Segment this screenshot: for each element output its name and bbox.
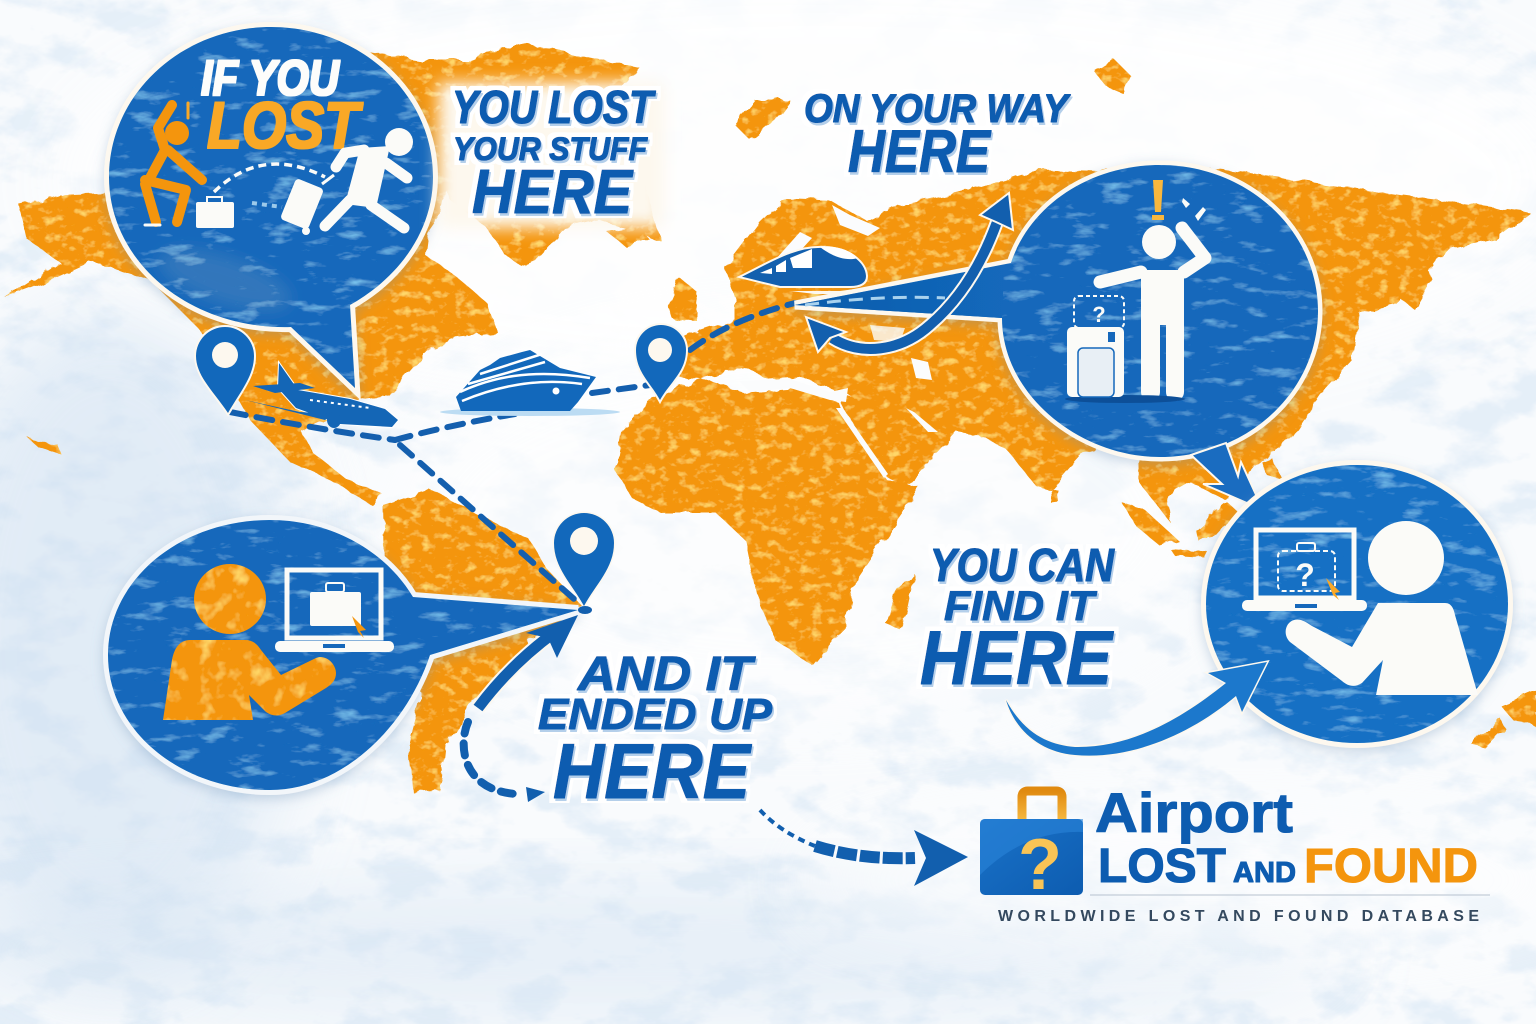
pin: origin [196, 327, 254, 413]
arrow: double curve from bubble [806, 193, 1013, 352]
bubble: finding item [1206, 465, 1508, 743]
alaskan chain [28, 438, 62, 455]
icon: train [739, 247, 885, 294]
icon: suitcase: ? [1092, 302, 1106, 327]
heading: lost: LOST [207, 88, 363, 162]
logo text [1095, 781, 1478, 893]
icon: surprised orange person [145, 103, 202, 225]
icon: running person with suitcase [280, 128, 413, 235]
arctic islands [735, 100, 790, 140]
pin: europe [636, 325, 686, 400]
arrow: dashed to logo [760, 810, 968, 886]
bubble: if you lost [109, 27, 433, 388]
route dashes [230, 303, 795, 606]
solid tail wedge [795, 265, 1004, 318]
icon: confused person [1100, 225, 1205, 402]
icon: cruise ship [440, 350, 620, 416]
heading: you can find it here [920, 539, 1115, 701]
heading: you lost your stuff here [438, 81, 664, 228]
arrow: curve to finding bubble [1006, 662, 1267, 756]
logo [980, 781, 1490, 925]
heading: on your way here: HERE [848, 118, 992, 185]
icon: dropped briefcase [196, 197, 234, 228]
heading: you can find it here: YOU CAN [930, 539, 1115, 591]
icon: laptop with dashed case: ? [1295, 557, 1315, 593]
heading: you lost your stuff here: YOUR STUFF [453, 131, 648, 167]
pin: found location [554, 513, 614, 614]
south america [383, 490, 582, 792]
greenland [368, 42, 660, 266]
heading: and it ended up here: AND IT [577, 648, 756, 701]
heading: and it ended up here: HERE [553, 727, 752, 815]
heading: you lost your stuff here: HERE [472, 158, 634, 227]
logo text: AND [1233, 857, 1296, 889]
world map [5, 42, 1536, 792]
heading: on your way here: ON YOUR WAY [804, 87, 1071, 131]
heading: on your way here [804, 87, 1071, 185]
heading: if you: IF YOU [201, 50, 341, 106]
icon: suitcase [1065, 296, 1185, 403]
icon: laptop with dashed case [1242, 530, 1367, 611]
bubble: confused traveller [795, 165, 1318, 457]
logo: WORLDWIDE LOST AND FOUND DATABASE [998, 908, 1479, 925]
icon: orange person [163, 564, 336, 720]
heading: you can find it here: FIND IT [944, 582, 1097, 629]
europe and asia [660, 162, 1530, 522]
uk [668, 278, 698, 322]
bubble: reporting lost item [108, 520, 578, 790]
heading: you lost your stuff here: YOU LOST [452, 81, 656, 133]
icon: exclamation [1152, 180, 1164, 220]
logo text: FOUND [1304, 840, 1478, 893]
icon: white person [1286, 521, 1478, 695]
dashed arc [214, 164, 325, 192]
icon: suitcase logo: ? [1018, 825, 1062, 905]
arrow: curving up to found pin [464, 615, 578, 802]
new zealand and australia edge [1472, 718, 1505, 748]
icon: airplane [245, 363, 398, 428]
north america [5, 60, 498, 505]
heading: you can find it here: HERE [920, 616, 1114, 701]
heading: and it ended up here [538, 648, 773, 815]
africa [615, 378, 920, 665]
southeast asia islands [1122, 503, 1178, 546]
heading: and it ended up here: ENDED UP [538, 690, 773, 739]
arrow: bubble two to bubble four [1191, 443, 1263, 510]
icon: suitcase logo [980, 791, 1083, 905]
icon: laptop with briefcase [275, 570, 394, 652]
dashed line in tail [805, 297, 945, 305]
logo text: Airport [1095, 781, 1293, 844]
seas cut through the land [739, 205, 938, 478]
japan [1395, 260, 1432, 310]
logo text: LOST [1098, 840, 1226, 893]
